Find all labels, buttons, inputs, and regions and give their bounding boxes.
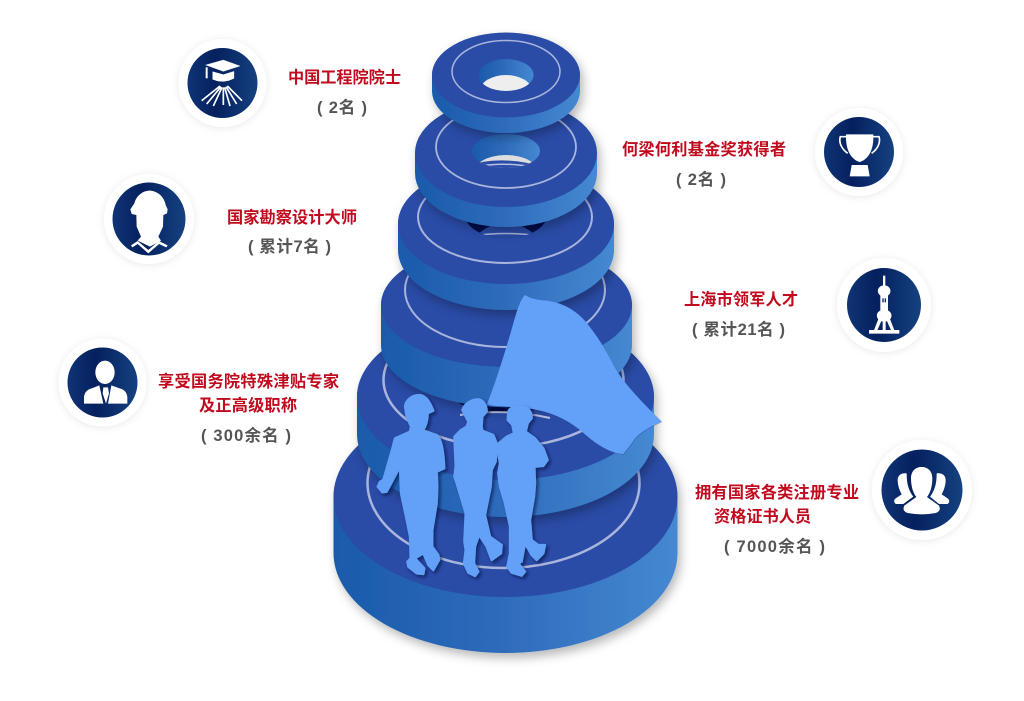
- badge disc: [112, 182, 186, 256]
- right shoulder: [108, 385, 127, 404]
- person left: [378, 395, 444, 574]
- lower face seen through hole: [480, 226, 532, 238]
- trophy glyph: [840, 134, 880, 176]
- label: Shanghai leading talents: [684, 290, 798, 339]
- mortarboard: [206, 60, 240, 71]
- hole wall: [478, 59, 534, 91]
- tower base: [869, 330, 899, 334]
- badge disc: [824, 117, 894, 187]
- left shoulder: [84, 385, 103, 404]
- shaft: [880, 295, 888, 312]
- light gap through hole: [480, 155, 532, 168]
- count: ( 累计7名 ): [248, 237, 331, 256]
- count: ( 7000余名 ): [724, 536, 825, 556]
- icon: master designer head: [104, 174, 194, 264]
- badge disc: [68, 348, 138, 418]
- badge background: [872, 440, 972, 540]
- title: 中国工程院院士: [288, 68, 401, 87]
- disk 5: [357, 313, 654, 517]
- badge background: [178, 39, 266, 127]
- tie: [103, 387, 109, 404]
- badge disc: [882, 450, 962, 530]
- count: ( 2名 ): [676, 170, 726, 189]
- disk 2: [415, 99, 597, 227]
- disk 6 face: [334, 397, 678, 597]
- disk 4 ring: [405, 233, 605, 347]
- label: State Council special allowance experts: [158, 372, 339, 445]
- hole wall: [472, 134, 540, 164]
- disk 1 ring: [452, 40, 560, 102]
- title line 2: 资格证书人员: [714, 507, 811, 526]
- centre person: [904, 467, 940, 514]
- head: [95, 361, 115, 384]
- lower sphere: [877, 310, 891, 322]
- title: 国家勘察设计大师: [227, 208, 357, 227]
- disk 1 hole: [478, 59, 534, 91]
- disk 3 hole: [466, 222, 546, 238]
- disk 2 side: [415, 99, 597, 227]
- disk 3 ring: [418, 171, 592, 263]
- suit glyph: [84, 361, 127, 404]
- label: Ho Leung Ho Lee award: [622, 140, 786, 189]
- icon: group of registered professionals: [872, 440, 972, 540]
- badge background: [837, 258, 931, 352]
- disk 2 ring: [436, 106, 576, 188]
- disk 4 side: [381, 243, 632, 407]
- title line 1: 享受国务院特殊津贴专家: [158, 372, 339, 391]
- icon: oriental pearl tower: [837, 258, 931, 352]
- open book rays: [202, 86, 242, 106]
- lower face in hole: [481, 160, 530, 168]
- disk 1 face: [432, 32, 580, 118]
- count: ( 2名 ): [317, 98, 367, 117]
- label: registered professionals: [695, 483, 859, 556]
- count: ( 累计21名 ): [692, 320, 785, 339]
- label: national survey and design masters: [227, 208, 357, 256]
- badge disc: [188, 48, 258, 118]
- title line 2: 及正高级职称: [199, 396, 297, 415]
- icon: academician graduation cap: [178, 39, 266, 127]
- upper sphere: [878, 285, 890, 297]
- silhouettes of three workers: [378, 395, 548, 576]
- disk 5 hole: [449, 367, 563, 413]
- tower legs: [874, 319, 895, 331]
- badge background: [815, 108, 903, 196]
- disk 2 face: [415, 99, 597, 207]
- disk 1: top tier: [432, 32, 580, 133]
- disk 1 side: [432, 33, 580, 133]
- disk 6 ring: [368, 398, 640, 568]
- hard hat and face: [130, 191, 168, 247]
- light gap through hole: [482, 75, 530, 91]
- left person: [894, 473, 913, 504]
- base: [850, 165, 870, 176]
- head glyph: [130, 191, 168, 253]
- disk 5 side: [357, 314, 654, 517]
- title: 何梁何利基金奖获得者: [622, 140, 786, 159]
- person right: [497, 407, 548, 576]
- disk 3 face: [398, 164, 614, 284]
- badge background: [58, 338, 146, 426]
- spire: [883, 276, 885, 287]
- disk 3: [398, 164, 614, 310]
- people glyph: [894, 467, 949, 514]
- disk 5 face: [357, 314, 654, 480]
- icon: expert in suit: [58, 338, 146, 426]
- handles: [840, 137, 880, 153]
- label: academicians: [288, 68, 401, 117]
- tassel: [204, 67, 210, 78]
- disk 5 ring: [384, 313, 624, 447]
- disk 4 face: [381, 243, 632, 367]
- badge background: [104, 174, 194, 264]
- title line 1: 拥有国家各类注册专业: [695, 483, 859, 502]
- disk 6 side: [334, 397, 678, 653]
- cap glyph: [202, 60, 242, 106]
- lower ring in hole: [486, 164, 526, 166]
- icon: trophy: [815, 108, 903, 196]
- disk 2 hole: [472, 134, 540, 168]
- title: 上海市领军人才: [684, 290, 798, 309]
- collar: [131, 241, 168, 253]
- right person: [930, 473, 949, 504]
- hole darkness: [466, 222, 546, 238]
- cup: [846, 134, 873, 162]
- cap base: [213, 71, 234, 81]
- disk 4: [381, 233, 632, 407]
- badge disc: [847, 268, 921, 342]
- count: ( 300余名 ): [201, 425, 291, 445]
- flag: [487, 295, 662, 454]
- person middle: [454, 399, 502, 576]
- lower ring seen through hole: [482, 232, 530, 236]
- disk 6: base tier: [334, 397, 678, 653]
- disk 3 side: [398, 164, 614, 310]
- disk 5 hole inner ring line: [460, 412, 550, 418]
- tower glyph: [869, 276, 899, 334]
